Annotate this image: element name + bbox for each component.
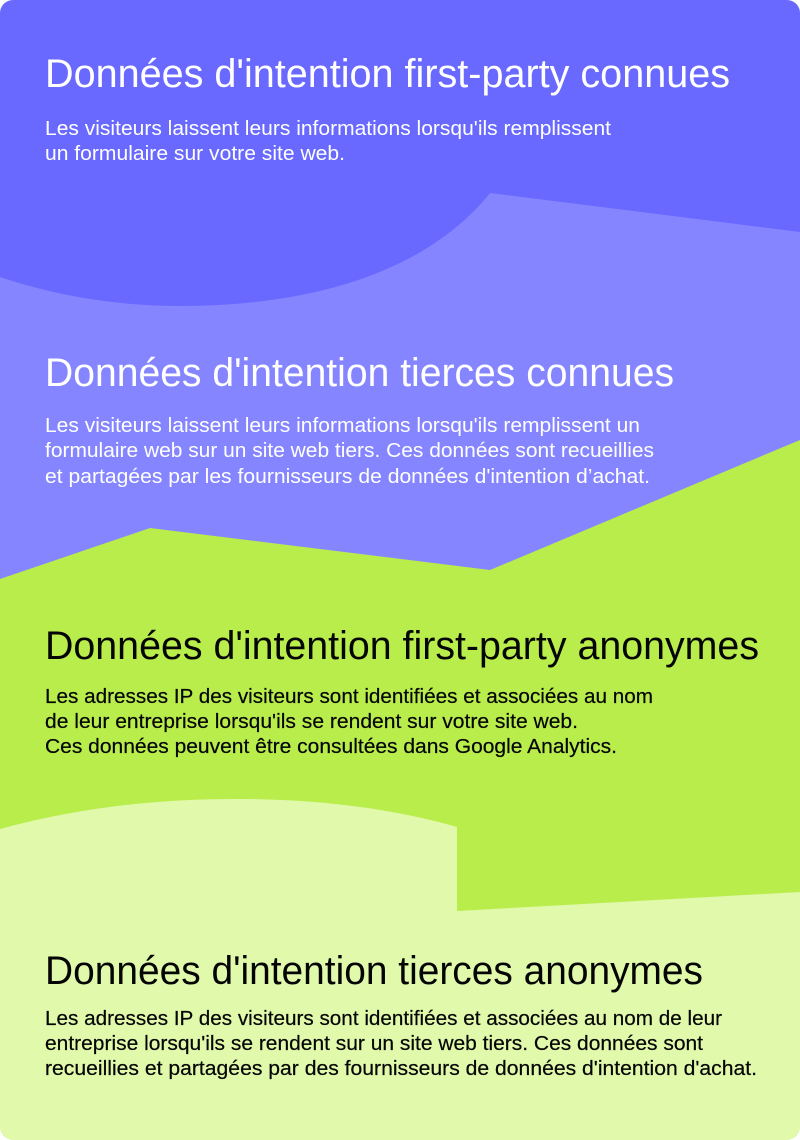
text block — [45, 1007, 757, 1080]
panel: third-party known background — [0, 193, 800, 600]
section: third-party anonymous — [45, 949, 757, 1080]
section: first-party anonymous — [45, 624, 759, 758]
heading: Données d'intention first-party connues — [45, 52, 730, 96]
panel: first-party anonymous background — [0, 440, 800, 920]
text block: Les visiteurs laissent leurs informations lorsqu'ils remplissent un — [45, 414, 640, 437]
heading: Données d'intention first-party anonymes — [45, 624, 759, 668]
heading: Données d'intention tierces anonymes — [45, 949, 703, 993]
text block: formulaire web sur un site web tiers. Ces données sont recueillies — [45, 439, 654, 462]
text block: de leur entreprise lorsqu'ils se rendent sur votre site web. — [45, 710, 578, 733]
text block: entreprise lorsqu'ils se rendent sur un site web tiers. Ces données sont — [45, 1032, 703, 1055]
heading: Données d'intention tierces connues — [45, 351, 674, 395]
text block: Les adresses IP des visiteurs sont identifiées et associées au nom — [45, 685, 653, 708]
text block: un formulaire sur votre site web. — [45, 142, 345, 165]
section: third-party known — [45, 351, 674, 488]
section: first-party known — [45, 52, 730, 165]
text block — [46, 120, 611, 160]
text block — [45, 414, 654, 488]
text block: Les adresses IP des visiteurs sont identifiées et associées au nom de leur — [45, 1007, 722, 1030]
text block: recueillies et partagées par des fournisseurs de données d'intention d'achat. — [45, 1057, 757, 1080]
text block: Ces données peuvent être consultées dans Google Analytics. — [45, 735, 617, 758]
text block — [45, 685, 653, 758]
panel: first-party known background — [0, 0, 800, 320]
panel: third-party anonymous background — [0, 799, 800, 1140]
text block: Les visiteurs laissent leurs informations lorsqu'ils remplissent — [45, 117, 611, 140]
text block: et partagées par les fournisseurs de données d'intention d’achat. — [45, 465, 650, 488]
